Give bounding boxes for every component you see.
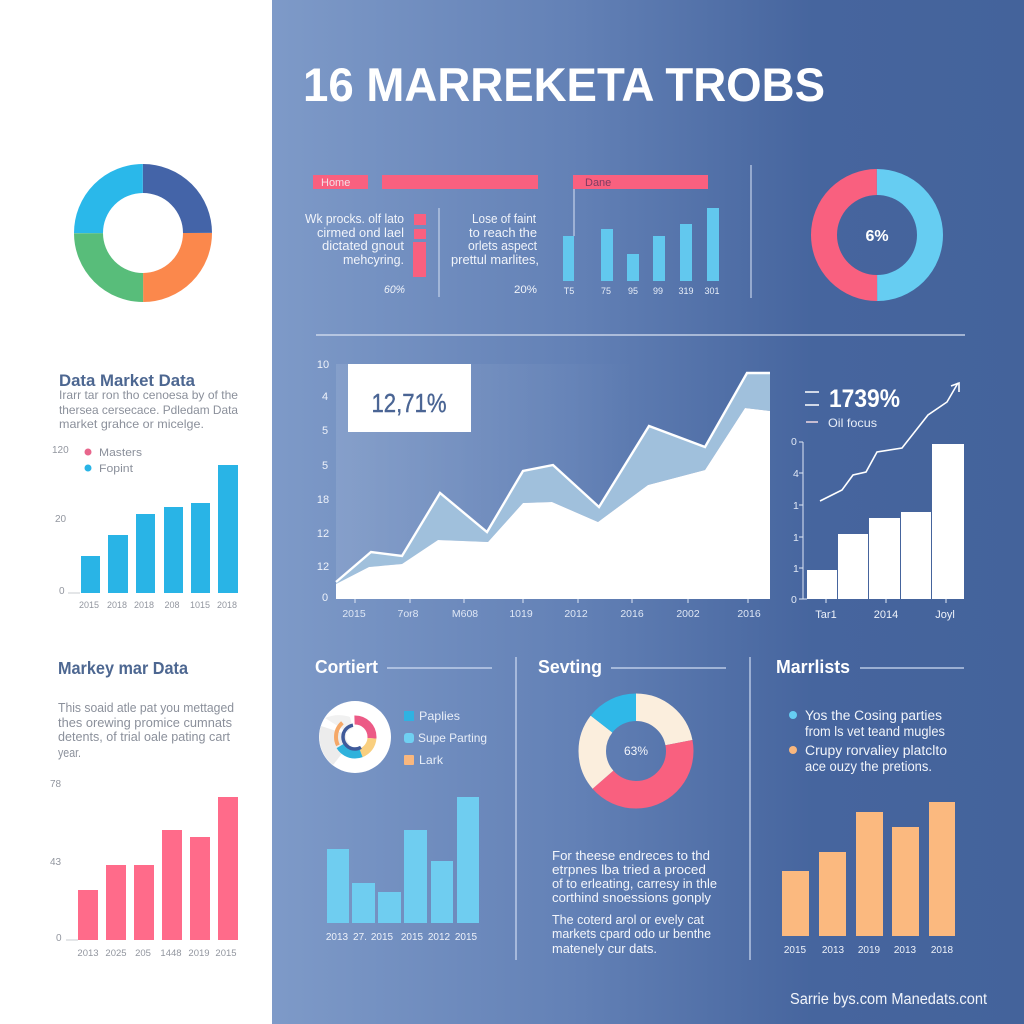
panel: white sidebar [0, 0, 272, 1024]
bars: white [807, 444, 964, 599]
stat: 1739% [805, 385, 900, 430]
panel: cortiert [315, 657, 492, 943]
text block: markey description: detents, of trial oale pating cart [58, 730, 231, 744]
bar chart: pink: 2019 [188, 948, 210, 959]
bar chart: cyan: 2018 [107, 600, 127, 610]
bar chart: pink: 2015 [215, 948, 237, 959]
text block: left column [305, 211, 405, 296]
bar chart: light blue: 2013 [326, 932, 349, 943]
panel: blue main area [272, 0, 1024, 1024]
bar chart: pink: 1448 [160, 948, 182, 959]
panel: sidebar data market data [52, 371, 238, 610]
bar chart: top blue: 95 [628, 286, 638, 296]
text block: sidebar description: Irarr tar ron tho cenoesa by of the [59, 388, 238, 402]
text block: second column: Lose of faint [472, 211, 536, 226]
text block: sevting description: corthind snoessions gonply [552, 890, 711, 905]
text block: sevting description [552, 848, 717, 956]
bar chart: top blue: T5 [564, 286, 574, 296]
donut: 63%: 63% [624, 744, 648, 758]
bar chart: pink: 43 [50, 857, 62, 868]
text block: markey description: This soaid atle pat you mettaged [58, 701, 234, 715]
panel: 1739% bar and trend: 1 [793, 532, 799, 544]
heading: sevting: Sevting [538, 657, 602, 677]
text block: second column: to reach the [469, 225, 537, 240]
heading: marrlists: Marrlists [776, 657, 850, 677]
bar chart: pink: 78 [50, 779, 62, 790]
bar chart: cyan: 20 [55, 514, 67, 525]
legend: Lark [419, 753, 444, 767]
x axis labels: M608 [452, 608, 478, 620]
y axis labels: 10 [317, 359, 329, 371]
text block: second column: orlets aspect [468, 238, 537, 253]
bar chart: cyan: 208 [164, 600, 180, 610]
stat: 1739%: 1739% [829, 385, 900, 413]
text block: left column: Wk procks. olf lato [305, 211, 404, 226]
axis [799, 442, 946, 603]
bar chart: cyan: 2015 [79, 600, 99, 610]
bar chart: top blue: 75 [601, 286, 611, 296]
bar chart: orange [782, 802, 955, 956]
bullet list: ace ouzy the pretions. [805, 759, 932, 774]
y axis labels: 4 [322, 391, 328, 403]
bar chart: light blue: 2015 [401, 932, 424, 943]
heading: cortiert: Cortiert [315, 657, 378, 677]
text block: sevting description: etrpnes lba tried a proced [552, 862, 706, 877]
bar chart: light blue: 2015 [455, 932, 478, 943]
y axis labels: 5 [322, 425, 328, 437]
bar chart: pink: 2013 [77, 948, 99, 959]
text block: left column: mehcyring. [343, 252, 404, 267]
y axis labels: 12 [317, 561, 329, 573]
text block: left column: 60% [384, 284, 405, 296]
upper band [336, 373, 770, 584]
area chart [317, 359, 770, 620]
bar chart: orange: 2019 [858, 945, 881, 956]
bar chart: cyan: 120 [52, 445, 69, 456]
text block: sevting description: The coterd arol or evely cat [552, 912, 704, 927]
title: 16 MARREKETA TROBS [303, 58, 825, 111]
panel: marrlists [776, 657, 964, 956]
bar chart: top blue: 301 [704, 286, 720, 296]
arrow: trend line [820, 383, 959, 501]
bar chart: pink: 0 [56, 933, 62, 944]
footer text: Sarrie bys.com Manedats.cont [790, 991, 988, 1008]
text block: sidebar description: market grahce or micelge. [59, 417, 204, 431]
legend [84, 447, 143, 475]
legend: Paplies [419, 709, 460, 723]
bullet list [789, 708, 947, 774]
y axis labels: 0 [322, 592, 328, 604]
bar chart: top blue [563, 189, 720, 296]
panel: sevting [538, 657, 726, 956]
bar chart: orange: 2013 [894, 945, 917, 956]
text block: sevting description: For theese endreces to thd [552, 848, 710, 863]
x axis labels: 1019 [509, 608, 533, 620]
upper line [336, 373, 770, 582]
bar chart: cyan [52, 445, 238, 610]
legend: Masters [99, 447, 143, 459]
pink header bars [313, 175, 708, 189]
panel: sidebar markey mar data [50, 658, 238, 959]
text block: left column: dictated gnout [322, 238, 404, 253]
label: dane: Dane [585, 177, 611, 189]
bar chart: top blue: 99 [653, 286, 663, 296]
legend: Supe Parting [418, 731, 487, 745]
bar chart: pink: 205 [135, 948, 151, 959]
callout: 12,71% [348, 364, 471, 432]
panel: sidebar donut chart [88, 178, 198, 288]
bar chart: top blue: 319 [678, 286, 694, 296]
callout: 12,71%: 12,71% [372, 388, 446, 418]
panel: 1739% bar and trend: 0 [791, 594, 797, 606]
x axis labels: 2002 [676, 608, 700, 620]
label: home: Home [321, 177, 350, 189]
lower white area [336, 408, 770, 599]
bar chart: cyan: 1015 [190, 600, 210, 610]
bar chart: light blue: 2012 [428, 932, 451, 943]
text block: markey description: thes orewing promice cumnats [58, 716, 232, 730]
donut: 6% [824, 182, 930, 288]
bar chart: cyan: 2018 [134, 600, 154, 610]
panel: 1739% bar and trend: Tar1 [815, 609, 837, 621]
panel: 1739% bar and trend: 2014 [874, 609, 898, 621]
panel: 1739% bar and trend: 1 [793, 563, 799, 575]
x axis labels: 2015 [342, 608, 366, 620]
x axis labels: 2012 [564, 608, 588, 620]
y axis labels: 5 [322, 460, 328, 472]
x axis labels: 2016 [737, 608, 761, 620]
text block: left column: cirmed ond lael [317, 225, 404, 240]
legend [404, 709, 487, 767]
bar chart: orange: 2013 [822, 945, 845, 956]
y axis labels [317, 359, 329, 604]
panel: 1739% bar and trend: 1 [793, 500, 799, 512]
x axis labels: 7or8 [397, 608, 419, 620]
text block: sevting description: markets cpard odo ur benthe [552, 926, 711, 941]
bar chart: orange: 2018 [931, 945, 954, 956]
heading: markey mar data: Markey mar Data [58, 658, 188, 678]
x axis labels: 2016 [620, 608, 644, 620]
panel: 1739% bar and trend [791, 383, 964, 621]
panel: 1739% bar and trend: Joyl [935, 609, 955, 621]
bar chart: pink [50, 779, 238, 959]
donut: 63% [592, 707, 680, 795]
pink stacked markers [413, 214, 426, 277]
bullet list: Crupy rorvaliey platclto [805, 743, 947, 758]
x axis labels [342, 608, 761, 620]
legend: Fopint [99, 463, 133, 475]
stat: 1739%: Oil focus [828, 416, 877, 430]
bar chart: light blue: 27. [353, 932, 367, 943]
text block: second column: 20% [514, 284, 537, 296]
y axis labels: 12 [317, 528, 329, 540]
text block: sidebar description: thersea cersecace. Pdledam Data [59, 403, 238, 417]
panel: top summary [305, 165, 930, 298]
bar chart: orange: 2015 [784, 945, 807, 956]
text block: second column [451, 211, 539, 296]
bar chart: light blue: 2015 [371, 932, 394, 943]
text block: sevting description: of to erleating, carresy in thle [552, 876, 717, 891]
y axis labels: 18 [317, 494, 329, 506]
text block: markey description: year. [58, 746, 81, 760]
panel: 1739% bar and trend: 4 [793, 468, 799, 480]
text block: markey description [58, 701, 234, 760]
bar chart: cyan: 2018 [217, 600, 237, 610]
bar chart: light blue [326, 797, 479, 943]
bar chart: cyan: 0 [59, 586, 65, 597]
panel: 1739% bar and trend: 0 [791, 436, 797, 448]
heading: data market data: Data Market Data [59, 371, 196, 390]
text block: second column: prettul marlites, [451, 252, 539, 267]
donut: 6%: 6% [865, 228, 889, 245]
bullet list: Yos the Cosing parties [805, 708, 942, 723]
text block: sidebar description [59, 388, 238, 431]
text block: sevting description: matenely cur dats. [552, 941, 657, 956]
bullet list: from ls vet teand mugles [805, 724, 945, 739]
icon: mini donut [319, 701, 391, 773]
bar chart: pink: 2025 [105, 948, 127, 959]
